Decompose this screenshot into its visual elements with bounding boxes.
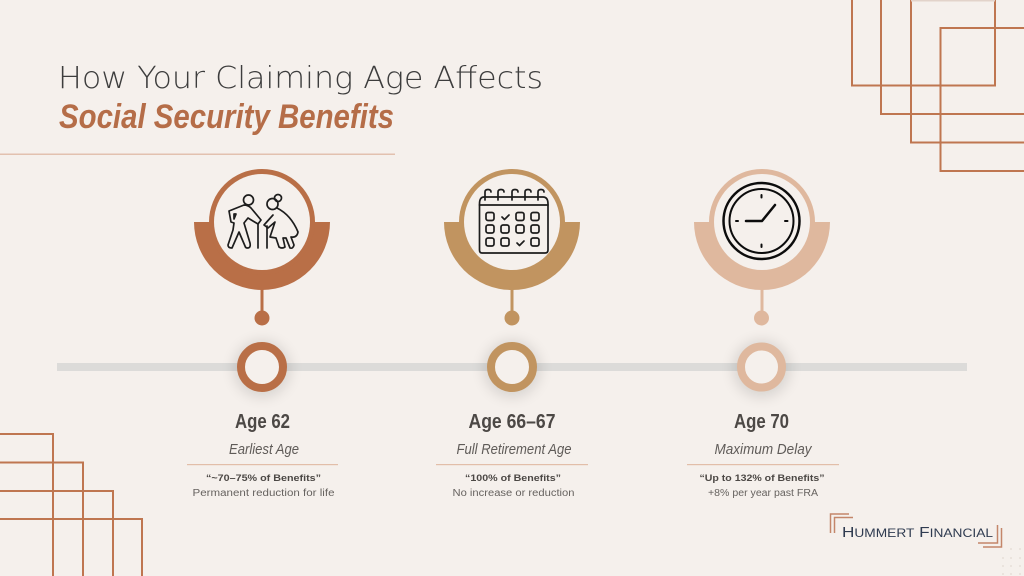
text: age 66-67: No increase or reduction	[452, 488, 574, 499]
node: age 66-67	[484, 341, 540, 397]
logo wordmark: HUMMERT FINANCIAL	[842, 524, 993, 541]
icon: clock	[724, 183, 800, 259]
title line 1: How Your Claiming Age Affects	[58, 61, 543, 96]
text: age 62: Earliest Age	[229, 441, 299, 458]
icon: calendar	[480, 190, 548, 253]
node: age 70	[734, 341, 790, 397]
decoration: bottom left squares	[0, 434, 142, 576]
milestone: age 70	[687, 169, 839, 499]
text: age 62: Permanent reduction for life	[192, 488, 335, 499]
text: age 66-67: “100% of Benefits”	[465, 473, 561, 484]
text: age 70: +8% per year past FRA	[708, 488, 818, 499]
milestone: age 62	[187, 169, 338, 499]
text: age 66-67	[436, 411, 588, 499]
text: age 70	[687, 411, 839, 499]
node: age 62	[234, 341, 290, 397]
text: age 62	[187, 411, 338, 499]
text: age 66-67: Age 66–67	[468, 411, 556, 433]
icon: elderly couple with canes	[228, 194, 298, 248]
text: age 66-67: Full Retirement Age	[456, 441, 572, 458]
logo brackets	[830, 514, 1002, 547]
title underline	[0, 154, 395, 155]
text: age 62: Age 62	[235, 411, 290, 433]
title line 2: Social Security Benefits	[59, 98, 394, 136]
pendant: age 62	[194, 169, 330, 326]
pendant: age 70	[694, 169, 830, 326]
text: age 70: Age 70	[734, 411, 789, 433]
decoration: dot grid	[1002, 548, 1021, 575]
decoration: top right squares	[852, 0, 1024, 171]
text: age 70: “Up to 132% of Benefits”	[700, 473, 825, 484]
title	[58, 61, 543, 136]
pendant: age 66-67	[444, 169, 580, 326]
text: age 70: Maximum Delay	[714, 441, 813, 458]
logo	[830, 514, 1002, 547]
timeline bar	[57, 363, 967, 371]
milestone: age 66-67	[436, 169, 588, 499]
text: age 62: “~70–75% of Benefits”	[206, 473, 321, 484]
